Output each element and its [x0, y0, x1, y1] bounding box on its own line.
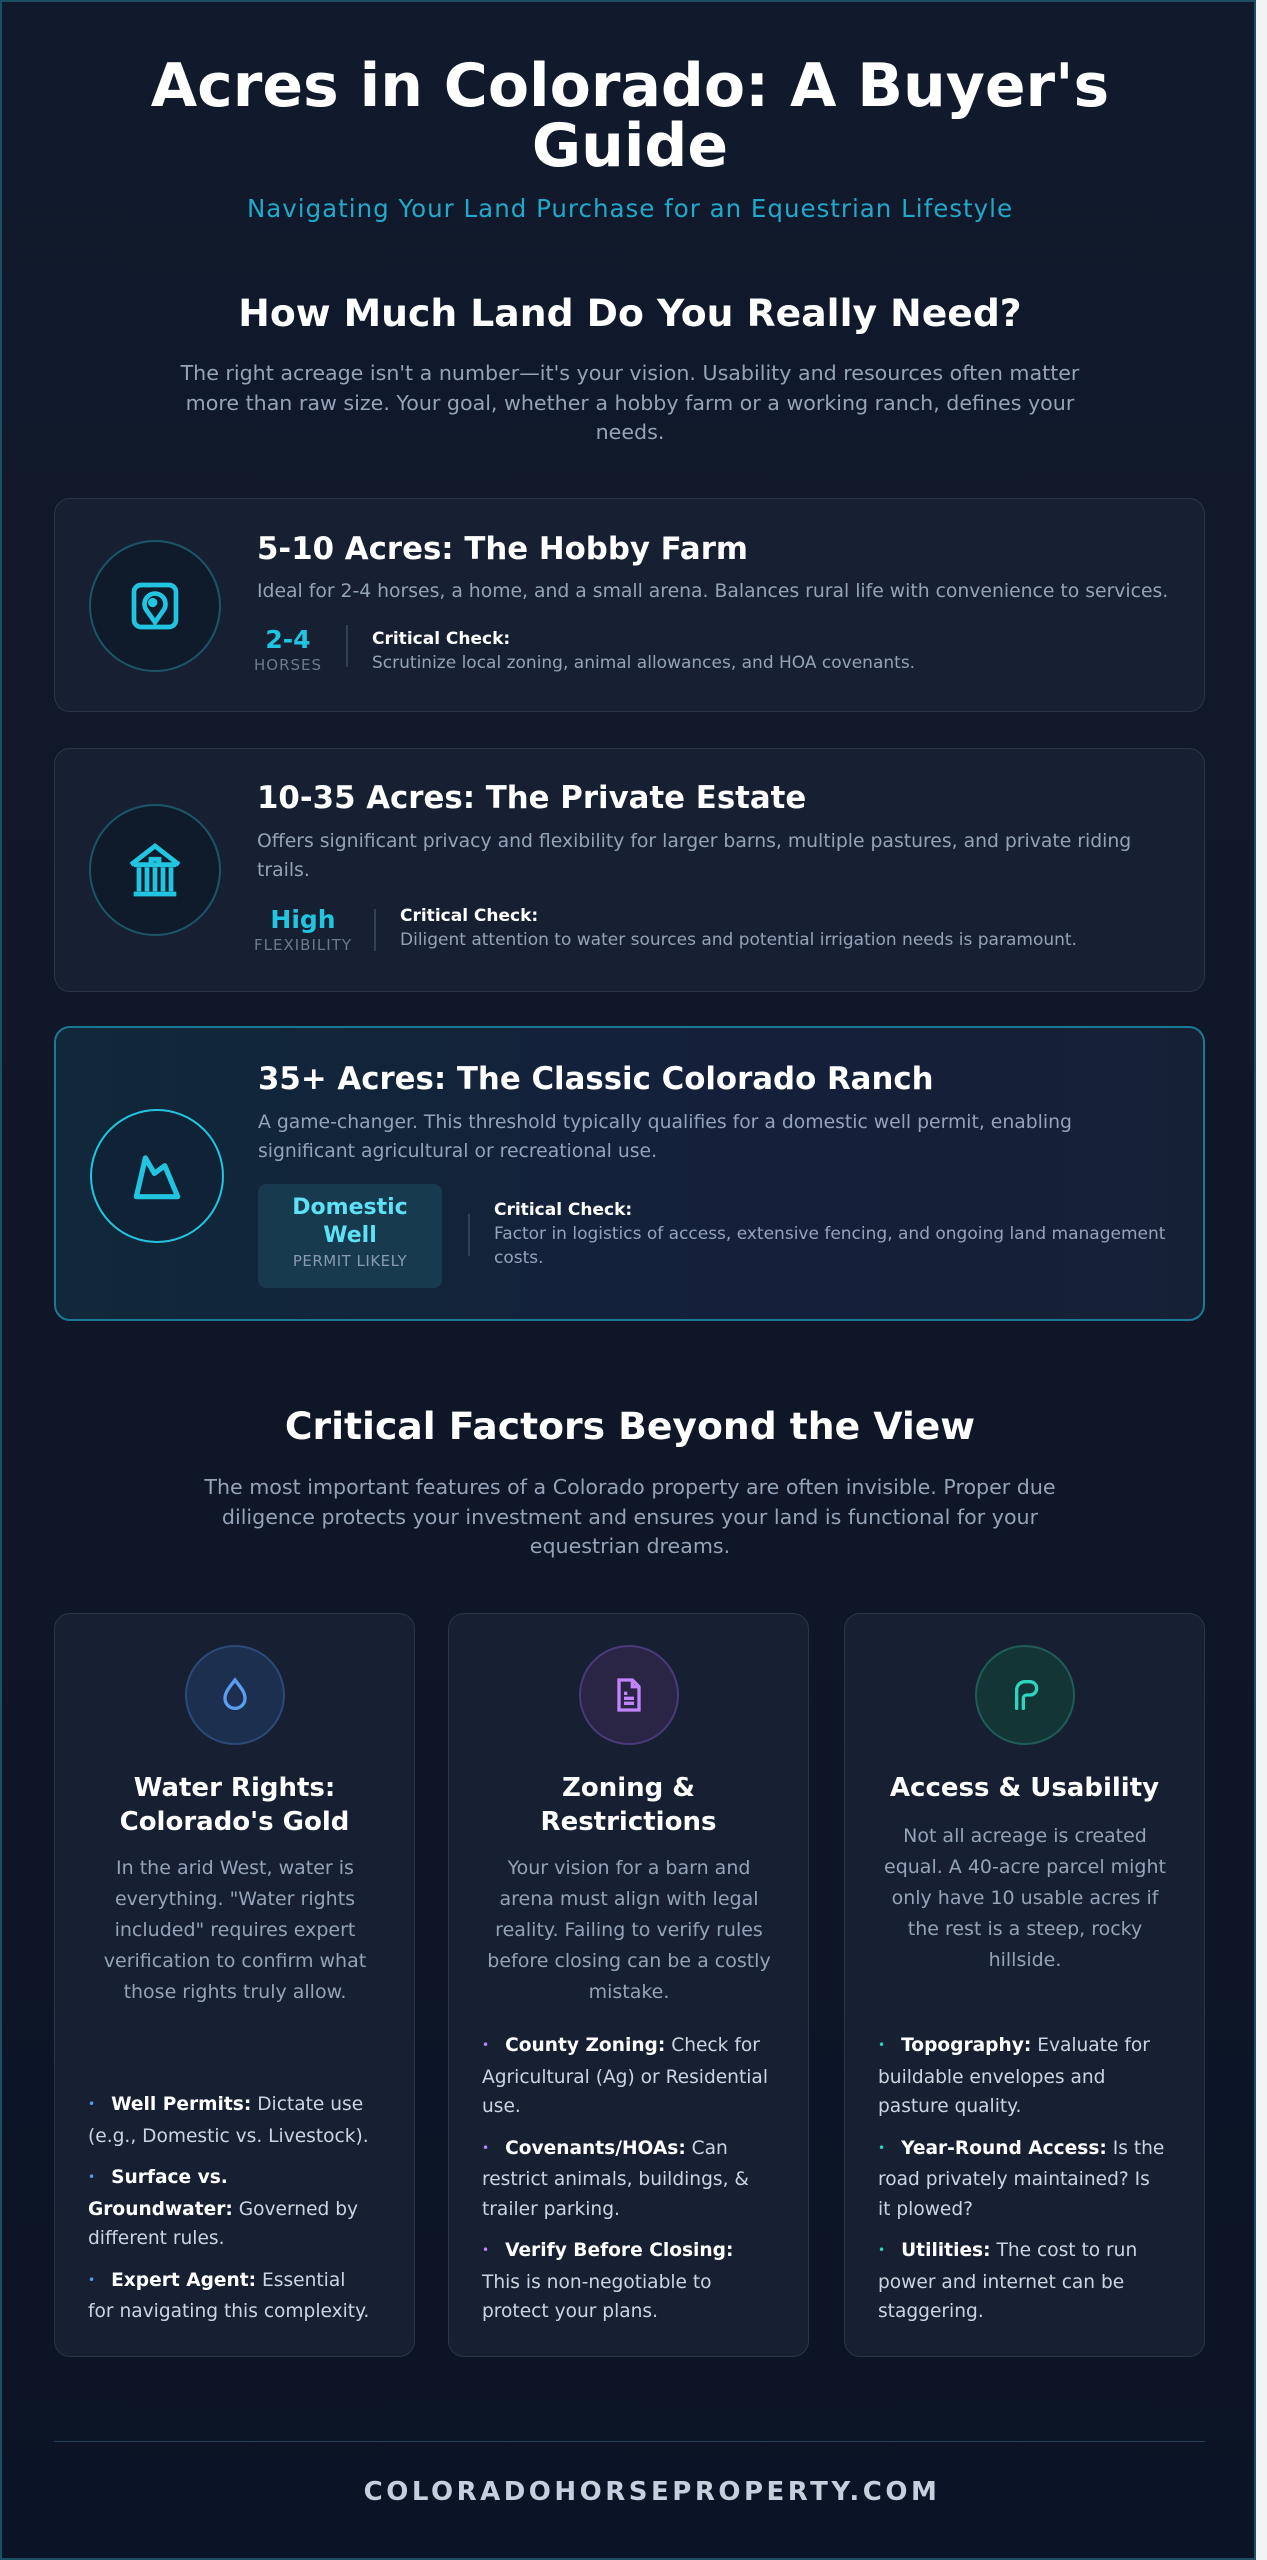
bullet list: Year-Round Access: Is the road privately maintained? Is it plowed?	[878, 2138, 1164, 2220]
icon: mountain	[90, 1109, 224, 1243]
badge: domestic well: Well	[323, 1223, 377, 1248]
stat: horses: 2-4	[265, 625, 311, 654]
bullet list	[878, 2035, 1164, 2322]
stat: horses	[254, 625, 322, 674]
badge: domestic well: PERMIT LIKELY	[293, 1252, 407, 1270]
title: Guide	[532, 111, 728, 181]
title	[151, 51, 1109, 181]
subtitle: Navigating Your Land Purchase for an Equestrian Lifestyle	[247, 194, 1013, 223]
critical check: Critical Check:	[400, 906, 538, 926]
description: Your vision for a barn and arena must align with legal reality. Failing to verify rules before closing can be a costly mistake.	[487, 1857, 771, 2003]
critical check	[372, 629, 915, 673]
description: In the arid West, water is everything. "Water rights included" requires expert verification to confirm what those rights truly allow.	[104, 1857, 366, 2003]
title: Acres in Colorado: A Buyer's	[151, 51, 1109, 121]
panel: classic ranch	[54, 1026, 1205, 1321]
icon: building	[89, 804, 221, 936]
bullet list: County Zoning: Check for Agricultural (Ag) or Residential use.	[482, 2035, 768, 2117]
bullet list: Surface vs. Groundwater: Governed by different rules.	[88, 2167, 358, 2249]
heading: 5-10 Acres: The Hobby Farm	[257, 531, 748, 567]
stat: flexibility: FLEXIBILITY	[254, 936, 352, 954]
intro text: The right acreage isn't a number—it's your vision. Usability and resources often matter more than raw size. Your goal, whether a hobby farm or a working ranch, defines your needs.	[181, 361, 1079, 444]
heading: 10-35 Acres: The Private Estate	[257, 780, 806, 816]
panel: water rights	[54, 1613, 415, 2357]
title	[120, 1773, 349, 1837]
critical check	[400, 906, 1077, 950]
description: Ideal for 2-4 horses, a home, and a small arena. Balances rural life with convenience to services.	[257, 581, 1168, 602]
title: Restrictions	[541, 1807, 716, 1837]
badge: domestic well	[258, 1184, 442, 1288]
description: A game-changer. This threshold typically qualifies for a domestic well permit, enabling significant agricultural or recreational use.	[258, 1112, 1072, 1162]
stat: flexibility	[254, 905, 352, 954]
panel: zoning	[448, 1613, 809, 2357]
icon: water drop	[185, 1645, 285, 1745]
heading: how much land: How Much Land Do You Really Need?	[238, 291, 1022, 335]
icon: tag	[89, 540, 221, 672]
bullet list	[88, 2094, 369, 2322]
title: Water Rights:	[134, 1773, 335, 1803]
panel: private estate	[54, 748, 1205, 992]
bullet list: Utilities: The cost to run power and internet can be staggering.	[878, 2240, 1137, 2322]
badge: domestic well: Domestic	[292, 1195, 408, 1220]
bullet list: Verify Before Closing: This is non-negotiable to protect your plans.	[482, 2240, 733, 2322]
title: Access & Usability	[890, 1773, 1159, 1803]
icon: document	[579, 1645, 679, 1745]
title: Zoning &	[562, 1773, 695, 1803]
bullet list	[482, 2035, 768, 2322]
critical check: Factor in logistics of access, extensive fencing, and ongoing land management costs.	[494, 1224, 1165, 1268]
bullet list: Well Permits: Dictate use (e.g., Domestic vs. Livestock).	[88, 2094, 369, 2146]
critical check: Critical Check:	[494, 1200, 632, 1220]
description: Offers significant privacy and flexibility for larger barns, multiple pastures, and private riding trails.	[257, 831, 1131, 881]
stat: flexibility: High	[270, 905, 336, 934]
critical check: Scrutinize local zoning, animal allowances, and HOA covenants.	[372, 653, 915, 673]
critical check	[494, 1200, 1165, 1268]
description: Not all acreage is created equal. A 40-acre parcel might only have 10 usable acres if the rest is a steep, rocky hillside.	[884, 1825, 1166, 1971]
bullet list: Expert Agent: Essential for navigating this complexity.	[88, 2270, 369, 2322]
panel: access	[844, 1613, 1205, 2357]
panel: hobby farm	[54, 498, 1205, 712]
heading: 35+ Acres: The Classic Colorado Ranch	[258, 1061, 934, 1097]
icon: road	[975, 1645, 1075, 1745]
title	[541, 1773, 716, 1837]
intro text 2: The most important features of a Colorado property are often invisible. Proper due diligence protects your investment and ensures your land is functional for your equestrian dreams.	[204, 1475, 1056, 1558]
critical check: Diligent attention to water sources and potential irrigation needs is paramount.	[400, 930, 1077, 950]
critical check: Critical Check:	[372, 629, 510, 649]
bullet list: Covenants/HOAs: Can restrict animals, buildings, & trailer parking.	[482, 2138, 749, 2220]
bullet list: Topography: Evaluate for buildable envelopes and pasture quality.	[878, 2035, 1150, 2117]
title: Colorado's Gold	[120, 1807, 349, 1837]
heading: critical factors: Critical Factors Beyond the View	[285, 1404, 975, 1448]
stat: horses: HORSES	[254, 656, 322, 674]
footer: COLORADOHORSEPROPERTY.COM	[364, 2477, 940, 2507]
